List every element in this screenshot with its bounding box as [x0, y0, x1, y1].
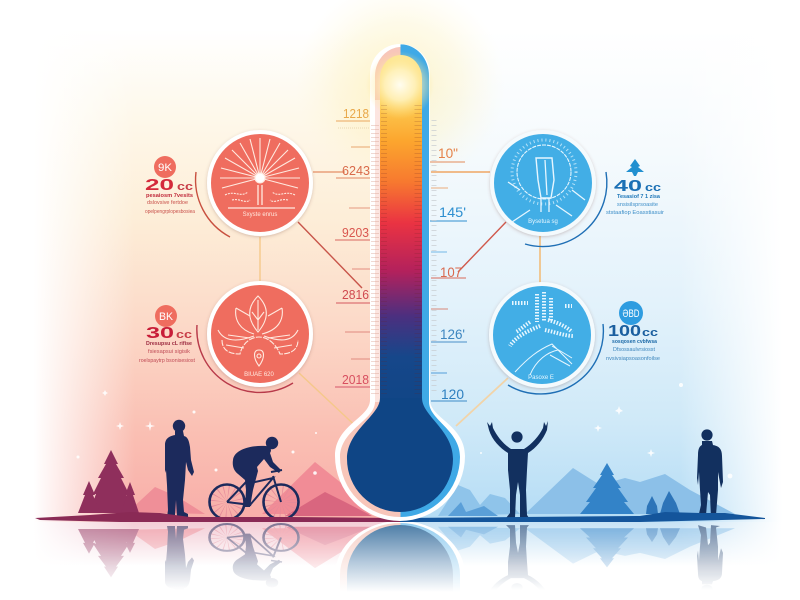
callout: 30 cc: [139, 305, 196, 364]
left mountains: [128, 462, 372, 516]
circle caption: Sxyste enrus: [243, 212, 277, 218]
circle caption: BIUAE 620: [244, 372, 275, 378]
value: [146, 325, 192, 342]
scale values right: [438, 145, 466, 402]
description: pesaiosm 7vesits: [146, 193, 193, 199]
description: [145, 193, 195, 215]
reflection of thermometer bulb: [338, 522, 462, 588]
trees right: [580, 463, 680, 514]
bulb: [347, 398, 453, 512]
value: [614, 178, 661, 195]
badge: 9K: [158, 162, 173, 174]
badge: BK: [159, 311, 174, 323]
callout: 20 cc: [145, 156, 195, 215]
description: nvsivsiapsoasonfoilse: [606, 356, 660, 362]
scale marks left: [335, 121, 380, 387]
value: cc: [645, 182, 661, 194]
scale values left: 9203: [342, 225, 369, 240]
description: sosqosen cvbfwsa: [612, 339, 657, 345]
person standing right: [697, 429, 723, 518]
tick marks: [375, 105, 434, 395]
description: snsisilsprsoasite: [617, 202, 658, 208]
description: Tesasiof 7 1 zisa: [617, 194, 660, 200]
left warm band: [340, 46, 400, 517]
connector lines: [260, 172, 540, 432]
arrow icon: [626, 159, 644, 176]
scale values right: 120: [441, 386, 464, 402]
value: 40: [614, 178, 642, 195]
glass outline: [335, 44, 465, 521]
value: [608, 323, 658, 340]
description: Dresupsu cL rifise: [146, 341, 192, 347]
description: fsiesapsui sigisik: [148, 349, 191, 355]
right ground: [400, 512, 765, 522]
value: cc: [176, 329, 192, 341]
value: cc: [177, 181, 193, 193]
circle: upper left, radial burst: [209, 132, 311, 234]
water reflection of the scene: [78, 523, 735, 586]
liquid column: [380, 55, 422, 400]
description: dslovsive fertdoe: [147, 200, 188, 206]
scale values right: 107: [440, 264, 462, 280]
value: 20: [145, 177, 174, 194]
scale marks right: [429, 162, 467, 401]
description: Dfsossaulvrsiosst: [613, 347, 656, 353]
trees left: [78, 450, 139, 513]
landscape scene with silhouettes: [78, 420, 735, 520]
lotus icon: [218, 296, 298, 366]
right cool band: [400, 44, 460, 517]
circle: lower left, lotus: [209, 283, 311, 385]
person standing left: [165, 420, 194, 517]
sparkles: [76, 383, 732, 478]
hot glow: [366, 51, 434, 119]
cyclist: [210, 437, 298, 520]
scale values left: 2018: [342, 372, 369, 387]
scale values right: 10": [438, 145, 458, 161]
arcs around circles: [196, 172, 607, 394]
callout: 100 cc: [606, 301, 660, 362]
description: [606, 194, 664, 216]
value: 100: [608, 323, 641, 340]
figure icon: [508, 140, 585, 222]
value: 30: [146, 325, 174, 342]
scale values right: 145': [439, 204, 466, 220]
description: [139, 341, 196, 364]
value: cc: [642, 327, 658, 339]
scale values left: 6243: [342, 163, 370, 178]
burst icon: [220, 138, 300, 208]
left ground: [35, 512, 400, 522]
description: roelspaytrp bsonisesiost: [139, 358, 196, 364]
callout: 40 cc: [606, 159, 664, 216]
description: opelpengrplopesbosiea: [145, 209, 195, 215]
circle: upper right, figure in ring: [492, 132, 594, 234]
scale values left: 1218: [343, 106, 369, 121]
white lower tube edge: [374, 100, 380, 402]
badge: ƏBD: [622, 308, 640, 320]
description: [606, 339, 660, 362]
scale values left: [342, 106, 370, 387]
circle: lower right, dotted tree: [491, 284, 593, 386]
thermometer: [335, 44, 465, 521]
scale values right: 126': [440, 326, 465, 342]
scale values left: 2816: [342, 287, 369, 302]
circle caption: Bysetua sg: [528, 219, 558, 225]
person arms raised: [487, 421, 548, 518]
dotted tree icon: [510, 292, 574, 375]
circle caption: Pasoxe E: [528, 375, 554, 381]
description: ststaafiop Eoasstiasuir: [606, 210, 664, 216]
right mountains: [438, 468, 735, 516]
value: [145, 177, 193, 194]
